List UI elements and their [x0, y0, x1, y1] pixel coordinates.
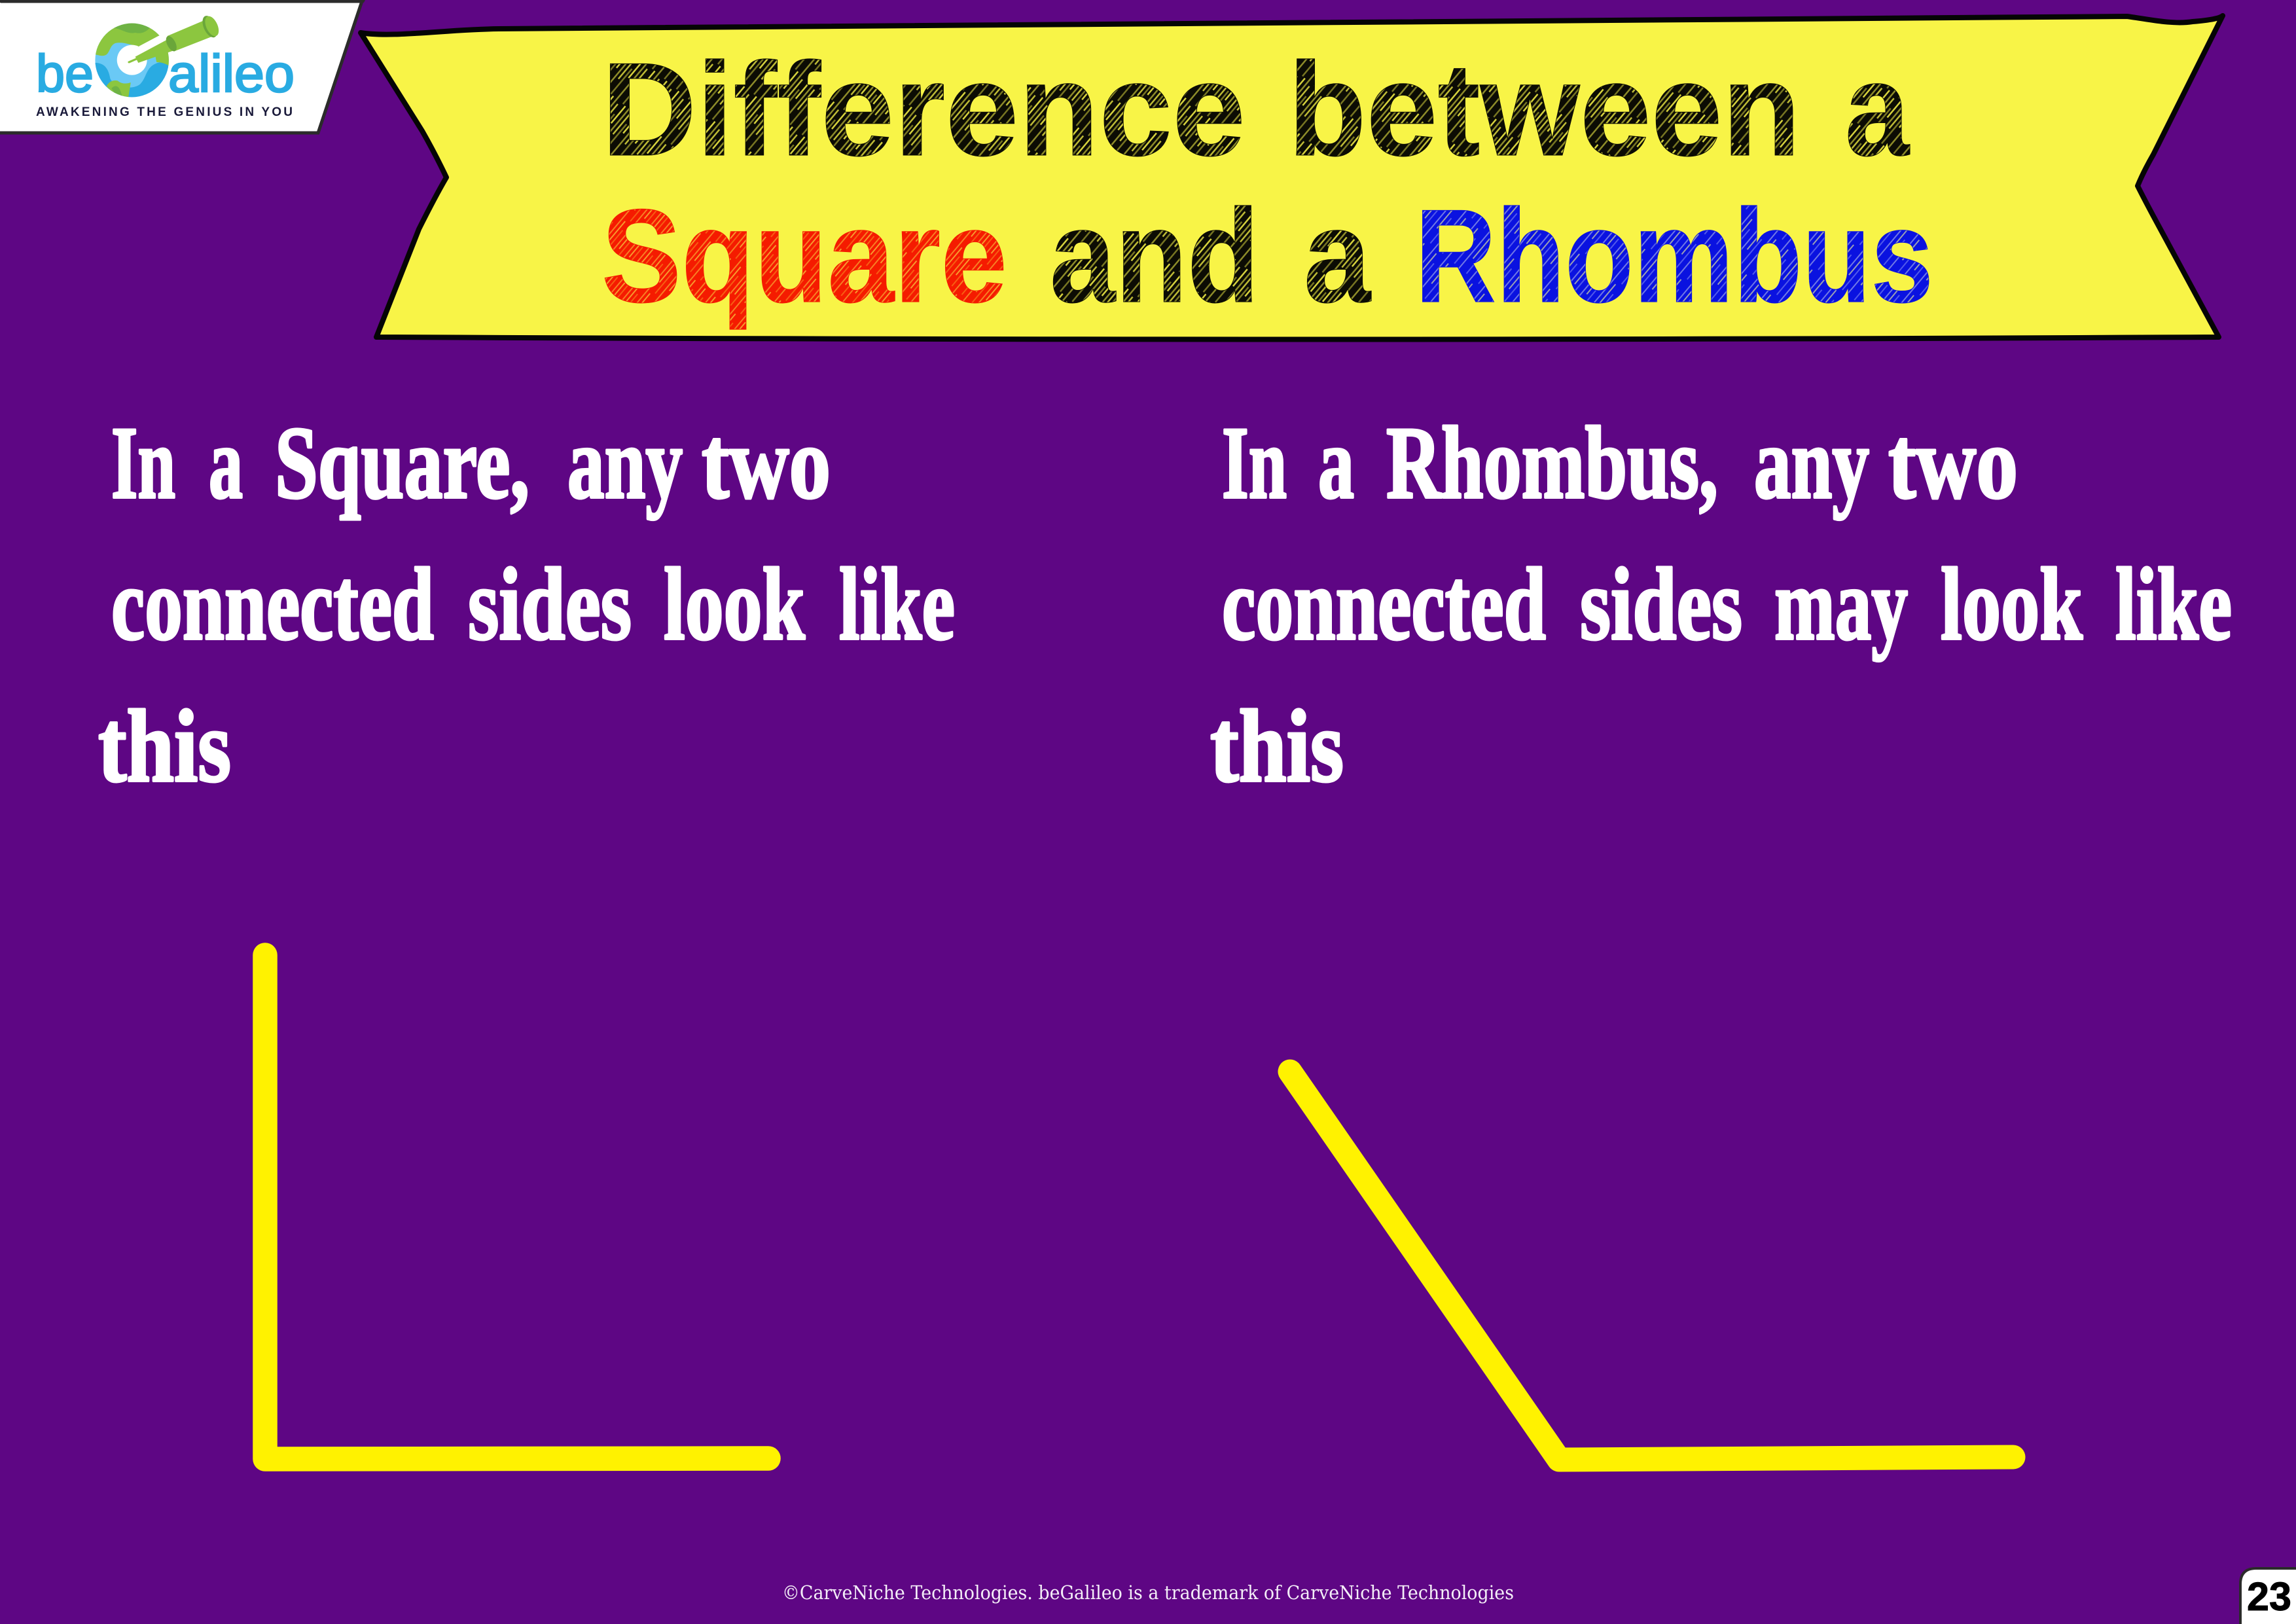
text block: square description: any	[567, 406, 683, 520]
title line 2	[601, 182, 1933, 331]
text block: rhombus description: sides	[1580, 547, 1742, 662]
title line 1	[601, 35, 1910, 184]
page number badge: 23	[2247, 1574, 2291, 1619]
text block: rhombus description: this	[1210, 689, 1344, 804]
title line 2: and	[1050, 182, 1259, 331]
text block: square description: connected	[111, 547, 434, 662]
text block: rhombus description: Rhombus,	[1386, 406, 1718, 520]
title line 2: Rhombus	[1415, 182, 1933, 331]
text block: square description: this	[98, 689, 231, 804]
diagram: rhombus connected sides	[1290, 1072, 2013, 1460]
page number badge	[2240, 1568, 2296, 1624]
logo wordmark: alileo	[168, 45, 295, 103]
text block: square description: a	[209, 406, 243, 520]
text block: rhombus description	[1210, 406, 2232, 804]
diagram: square connected sides	[265, 955, 768, 1459]
text block: square description	[98, 406, 955, 804]
text block: square description: look	[664, 547, 805, 662]
text block: square description: sides	[468, 547, 632, 662]
text block: rhombus description: In	[1222, 406, 1287, 520]
title line 1: between	[1288, 35, 1801, 184]
title line 1: a	[1845, 35, 1910, 184]
footer copyright: ©CarveNiche Technologies. beGalileo is a trademark of CarveNiche Technologies	[782, 1581, 1514, 1604]
title line 2: Square	[601, 182, 1007, 331]
text block: rhombus description: a	[1318, 406, 1354, 520]
text block: rhombus description: two	[1888, 406, 2018, 520]
text block: square description: like	[839, 547, 955, 662]
text block: square description: two	[702, 406, 831, 520]
title banner	[361, 16, 2223, 339]
title line 2: a	[1304, 182, 1372, 331]
logo wordmark	[36, 45, 295, 103]
text block: rhombus description: like	[2115, 547, 2232, 662]
text block: rhombus description: look	[1941, 547, 2083, 662]
text block: rhombus description: may	[1774, 547, 1908, 662]
logo panel	[0, 0, 365, 133]
logo wordmark: be	[36, 45, 94, 103]
text block: rhombus description: any	[1754, 406, 1869, 520]
text block: rhombus description: connected	[1222, 547, 1546, 662]
icon: globe and telescope	[93, 14, 221, 100]
text block: square description: In	[111, 406, 175, 520]
text block: square description: Square,	[275, 406, 529, 520]
logo tagline: AWAKENING THE GENIUS IN YOU	[36, 105, 293, 119]
title line 1: Difference	[601, 35, 1246, 184]
